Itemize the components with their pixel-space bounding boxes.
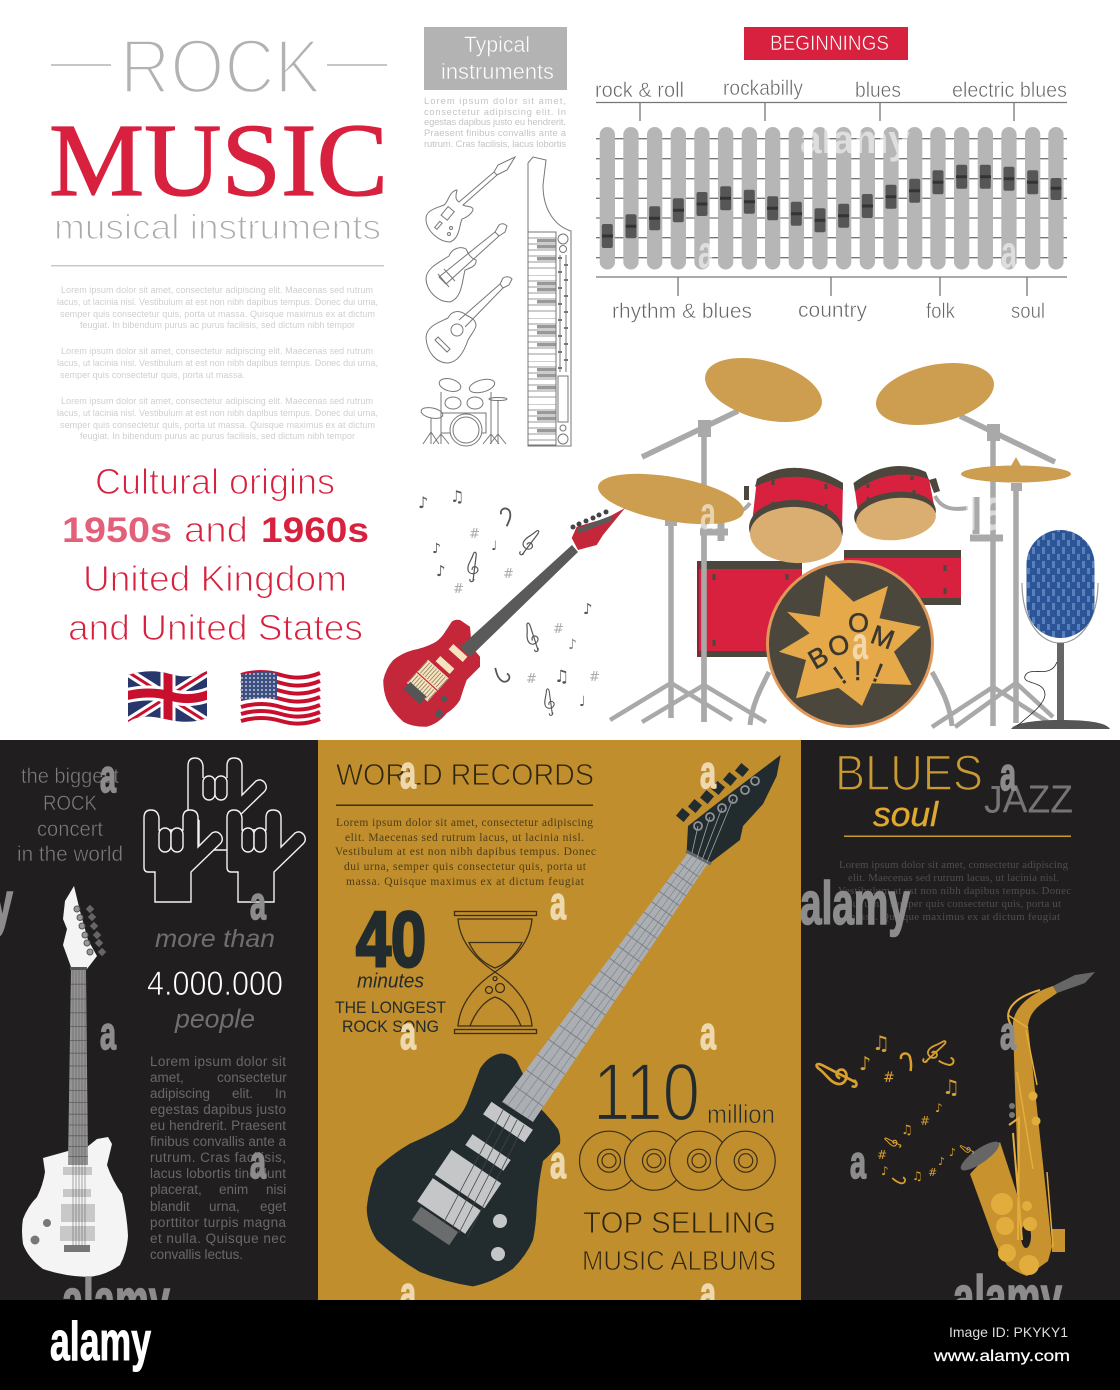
text: BOOM: O <box>848 608 869 638</box>
text block: Lorem ipsum dolor sit <box>150 1054 286 1069</box>
watermarks: a <box>700 1007 716 1059</box>
text: BOOM: ! <box>854 656 862 686</box>
cultural origins: and <box>184 509 248 550</box>
genre labels top: blues <box>855 79 901 102</box>
heading: in the world <box>17 843 123 866</box>
page background <box>0 0 1120 740</box>
cultural origins <box>62 461 369 648</box>
text block: dui urna, semper quis consectetur quis, porta ut <box>344 861 587 873</box>
music notes around red guitar: ♫ <box>450 487 464 506</box>
stat: 110 million: 110 <box>593 1047 700 1138</box>
music notes around red guitar: ♩ <box>579 694 586 710</box>
music notes around red guitar: # <box>526 672 537 687</box>
music notes: # <box>877 1148 887 1162</box>
genre labels bottom: soul <box>1011 300 1045 323</box>
title: ROCK: ROCK <box>120 24 321 110</box>
cultural origins: and United States <box>68 607 363 648</box>
stat: 40 minutes: 40 <box>356 895 426 983</box>
text block: rutrum. Cras facilisis, lacus lobortis <box>424 138 566 149</box>
text block: Lorem ipsum dolor sit amet, <box>424 95 566 106</box>
genre labels bottom: country <box>798 299 867 322</box>
watermarks: a <box>400 1007 416 1059</box>
text block: enim <box>219 1182 248 1197</box>
intro text: lacus, ut lacinia nisl. Vestibulum at est non nibh dapibus tempus. Donec dui urna, <box>57 408 378 418</box>
music notes around red guitar: # <box>469 527 480 542</box>
text block <box>335 817 596 888</box>
fader thumbs <box>602 165 1062 248</box>
music notes around red guitar: # <box>553 622 564 637</box>
logo: alamy: alamy <box>50 1310 151 1372</box>
music notes: ♪ <box>859 1053 871 1075</box>
intro text: Lorem ipsum dolor sit amet, consectetur adipiscing elit. Maecenas sed rutrum <box>61 346 373 356</box>
floor drums <box>697 530 961 722</box>
watermarks: alamy <box>800 118 911 162</box>
watermarks: a <box>400 746 416 798</box>
panel: blues jazz soul <box>801 740 1120 1300</box>
heading <box>835 745 1073 837</box>
intro text: lacus, ut lacinia nisl. Vestibulum at est non nibh dapibus tempus. Donec dui urna, <box>57 358 378 368</box>
intro text: lacus, ut lacinia nisl. Vestibulum at est non nibh dapibus tempus. Donec dui urna, <box>57 297 378 307</box>
watermarks: a <box>250 877 266 929</box>
heading: BLUES <box>835 745 983 801</box>
text: BOOM: ! <box>869 658 887 688</box>
text block: elit. <box>232 1086 253 1101</box>
watermarks: a <box>698 226 714 278</box>
panel: world records <box>318 740 801 1300</box>
music notes: ♫ <box>872 1031 890 1055</box>
icon: semi-acoustic guitar outline <box>426 224 507 302</box>
watermarks: a <box>550 1136 566 1188</box>
heading <box>744 27 908 60</box>
music notes around red guitar: ♪ <box>432 541 441 557</box>
text block: Lorem ipsum dolor sit amet, consectetur adipiscing <box>839 859 1069 871</box>
intro text: semper quis consectetur quis, porta ut massa. Quisque maximus ex at dictum <box>60 309 375 319</box>
text: BOOM: B <box>803 640 834 675</box>
heading: the biggest <box>21 765 119 788</box>
text block: Praesent finibus convallis ante a <box>424 127 567 138</box>
intro text: semper quis consectetur quis, porta ut massa. <box>60 370 245 380</box>
heading: ROCK <box>43 792 97 815</box>
watermarks: a <box>700 746 716 798</box>
title block <box>49 24 388 266</box>
genre labels top: electric blues <box>952 79 1067 102</box>
genre labels top: rockabilly <box>723 77 803 100</box>
text block: placerat, <box>150 1182 202 1197</box>
watermarks: alamy <box>62 1267 170 1334</box>
top selling albums label: TOP SELLING <box>583 1205 776 1240</box>
watermarks: a <box>700 1267 716 1319</box>
music notes: ♪ <box>949 1146 956 1159</box>
intro text: feugiat. In bibendum purus ac purus facilisis, sed dictum nibh tempor <box>80 431 355 441</box>
music notes around red guitar: ♪ <box>583 600 593 618</box>
icon: drum kit outline <box>420 376 507 446</box>
heading box <box>424 27 567 90</box>
intro text: semper quis consectetur quis, porta ut massa. Quisque maximus ex at dictum <box>60 420 375 430</box>
music notes: # <box>928 1166 937 1179</box>
music notes around red guitar: ♫ <box>554 667 569 687</box>
website: www.alamy.com <box>933 1348 1070 1365</box>
text block: amet, <box>150 1070 184 1085</box>
image id: Image ID: PKYKY1 <box>949 1324 1068 1340</box>
watermarks: a <box>852 617 868 669</box>
music notes: ♫ <box>901 1123 913 1138</box>
text block: lacus lobortis tincidunt <box>150 1166 286 1181</box>
title: MUSIC: MUSIC <box>49 103 388 218</box>
text block: Lorem ipsum dolor sit amet, consectetur adipiscing <box>336 817 593 829</box>
watermarks: a <box>400 1267 416 1319</box>
icon: keytar outline <box>528 157 571 446</box>
cultural origins: 1960s <box>261 511 369 550</box>
watermarks: a <box>850 1136 866 1188</box>
microphone <box>1011 530 1110 729</box>
genre labels top <box>595 77 1067 102</box>
text block: massa. Quisque maximus ex at dictum feugiat <box>346 876 585 888</box>
stat: 40 minutes: THE LONGEST <box>335 999 446 1017</box>
text block: rutrum. Cras facilisis, <box>150 1150 286 1165</box>
fader tracks <box>600 127 1064 270</box>
white bass guitar <box>22 886 128 1277</box>
music notes: # <box>883 1070 895 1086</box>
genre labels bottom: rhythm & blues <box>612 300 752 323</box>
heading box: instruments <box>441 59 554 84</box>
text block: adipiscing <box>150 1086 210 1101</box>
heading: JAZZ <box>984 778 1073 822</box>
watermarks: alamy <box>953 1264 1062 1331</box>
text block: elit. Maecenas sed rutrum lacus, ut lacinia nisl. <box>345 832 584 844</box>
heading: WORLD RECORDS <box>336 757 594 792</box>
drum kit <box>594 346 1110 729</box>
cymbal stands <box>610 411 1056 727</box>
stat: 40 minutes: minutes <box>357 970 424 992</box>
text block: et nulla. Quisque nec <box>150 1231 286 1246</box>
bottom strip <box>0 1300 1120 1390</box>
music notes: ♪ <box>938 1155 945 1168</box>
top selling albums label <box>582 1205 776 1276</box>
cultural origins: 1950s <box>62 511 172 550</box>
text block <box>424 95 567 149</box>
heading: BEGINNINGS <box>770 32 889 55</box>
watermarks: a <box>1001 226 1017 278</box>
genre labels bottom <box>612 299 1045 323</box>
music notes around red guitar: ♩ <box>491 539 497 554</box>
stat: 40 minutes: ROCK SONG <box>342 1018 439 1036</box>
text block: urna, <box>209 1199 240 1214</box>
watermarks: a <box>550 877 566 929</box>
text block: Vestibulum at est non nibh dapibus tempus. Donec <box>335 846 596 858</box>
icon: hourglass <box>454 912 536 1034</box>
flag: USA <box>241 672 320 724</box>
intro text: Lorem ipsum dolor sit amet, consectetur adipiscing elit. Maecenas sed rutrum <box>61 396 373 406</box>
stat: 40 minutes <box>335 895 446 1036</box>
text block: Vestibulum at est non nibh dapibus tempus. Donec <box>838 885 1071 897</box>
music notes around red guitar: # <box>589 670 600 685</box>
music notes: ♫ <box>942 1075 960 1099</box>
text block: elit. Maecenas sed rutrum lacus, ut lacinia nisl. <box>848 872 1059 884</box>
black electric guitar <box>367 755 781 1286</box>
watermarks: la <box>962 476 1013 543</box>
text block: egestas dapibus justo eu hendrerit. <box>424 116 566 127</box>
bass drum <box>766 560 934 728</box>
watermarks: a <box>100 750 116 802</box>
red electric guitar <box>383 508 625 727</box>
music notes: ♪ <box>881 1164 889 1178</box>
panel: biggest concert <box>0 740 318 1300</box>
music notes <box>813 1031 975 1184</box>
cultural origins: United Kingdom <box>83 558 347 599</box>
stat: 110 million: million <box>707 1099 775 1129</box>
watermarks: a <box>1000 1007 1016 1059</box>
intro text <box>57 285 378 441</box>
text block: porttitor turpis magna <box>150 1215 286 1230</box>
music notes around red guitar: # <box>453 582 464 597</box>
text: BOOM: ! <box>828 661 852 690</box>
heading box: Typical <box>464 32 530 57</box>
panel: typical instruments <box>420 27 571 446</box>
tom drums <box>744 466 940 565</box>
stat: more than 4.000.000 people: more than <box>155 925 275 953</box>
icon: electric guitar outline <box>426 157 515 242</box>
text: BOOM: M <box>867 619 898 655</box>
music notes around red guitar: ♪ <box>436 562 446 580</box>
text block: eu hendrerit. Praesent <box>150 1118 286 1133</box>
music notes around red guitar: # <box>503 567 514 582</box>
text block <box>838 859 1071 923</box>
genre labels top: rock & roll <box>595 79 684 102</box>
text block: finibus convallis ante a <box>150 1134 286 1149</box>
panel: beginnings fader chart <box>595 27 1067 323</box>
music notes around red guitar: ♪ <box>568 637 577 653</box>
stat: more than 4.000.000 people <box>147 925 283 1034</box>
subtitle: musical instruments <box>54 208 381 247</box>
watermarks: alamy <box>800 870 910 937</box>
intro text: feugiat. In bibendum purus ac purus facilisis, sed dictum nibh tempor <box>80 320 355 330</box>
stat: more than 4.000.000 people: 4.000.000 <box>147 965 283 1003</box>
text block: eget <box>260 1199 287 1214</box>
text block: egestas dapibus justo <box>150 1102 286 1117</box>
text block: consectetur adipiscing elit. In <box>424 106 566 117</box>
genre labels bottom: folk <box>926 300 955 323</box>
cymbals <box>594 346 1071 534</box>
music notes: ♫ <box>912 1169 923 1183</box>
music notes: # <box>920 1114 930 1128</box>
text block: In <box>275 1086 286 1101</box>
text block: dui urna, semper quis consectetur quis, porta ut <box>847 898 1061 910</box>
text: BOOM: O <box>825 628 853 663</box>
text: BOOM <box>803 608 898 690</box>
flag: UK <box>128 671 207 722</box>
icon: discs <box>580 1131 775 1190</box>
icon: rock hands <box>144 758 305 902</box>
intro text: Lorem ipsum dolor sit amet, consectetur adipiscing elit. Maecenas sed rutrum <box>61 285 373 295</box>
heading: concert <box>37 818 103 841</box>
heading: soul <box>873 796 940 834</box>
watermarks: a <box>1000 748 1016 800</box>
text block: nisi <box>266 1182 286 1197</box>
text block <box>150 1054 287 1262</box>
text block: massa. Quisque maximus ex at dictum feugiat <box>847 911 1060 923</box>
top selling albums label: MUSIC ALBUMS <box>582 1245 776 1276</box>
heading <box>17 765 123 866</box>
saxophone <box>957 972 1095 1276</box>
cultural origins: Cultural origins <box>95 461 335 502</box>
music notes: ♪ <box>935 1101 943 1115</box>
watermarks: a <box>250 1136 266 1188</box>
music notes around red guitar: ♪ <box>418 493 428 512</box>
music notes around red guitar <box>418 487 600 716</box>
text block: convallis lectus. <box>150 1247 243 1262</box>
text block: consectetur <box>217 1070 287 1085</box>
watermarks: a <box>700 487 716 539</box>
icon: acoustic guitar outline <box>426 277 512 363</box>
stat: more than 4.000.000 people: people <box>174 1004 255 1034</box>
text block: blandit <box>150 1199 190 1214</box>
watermarks: a <box>100 1007 116 1059</box>
